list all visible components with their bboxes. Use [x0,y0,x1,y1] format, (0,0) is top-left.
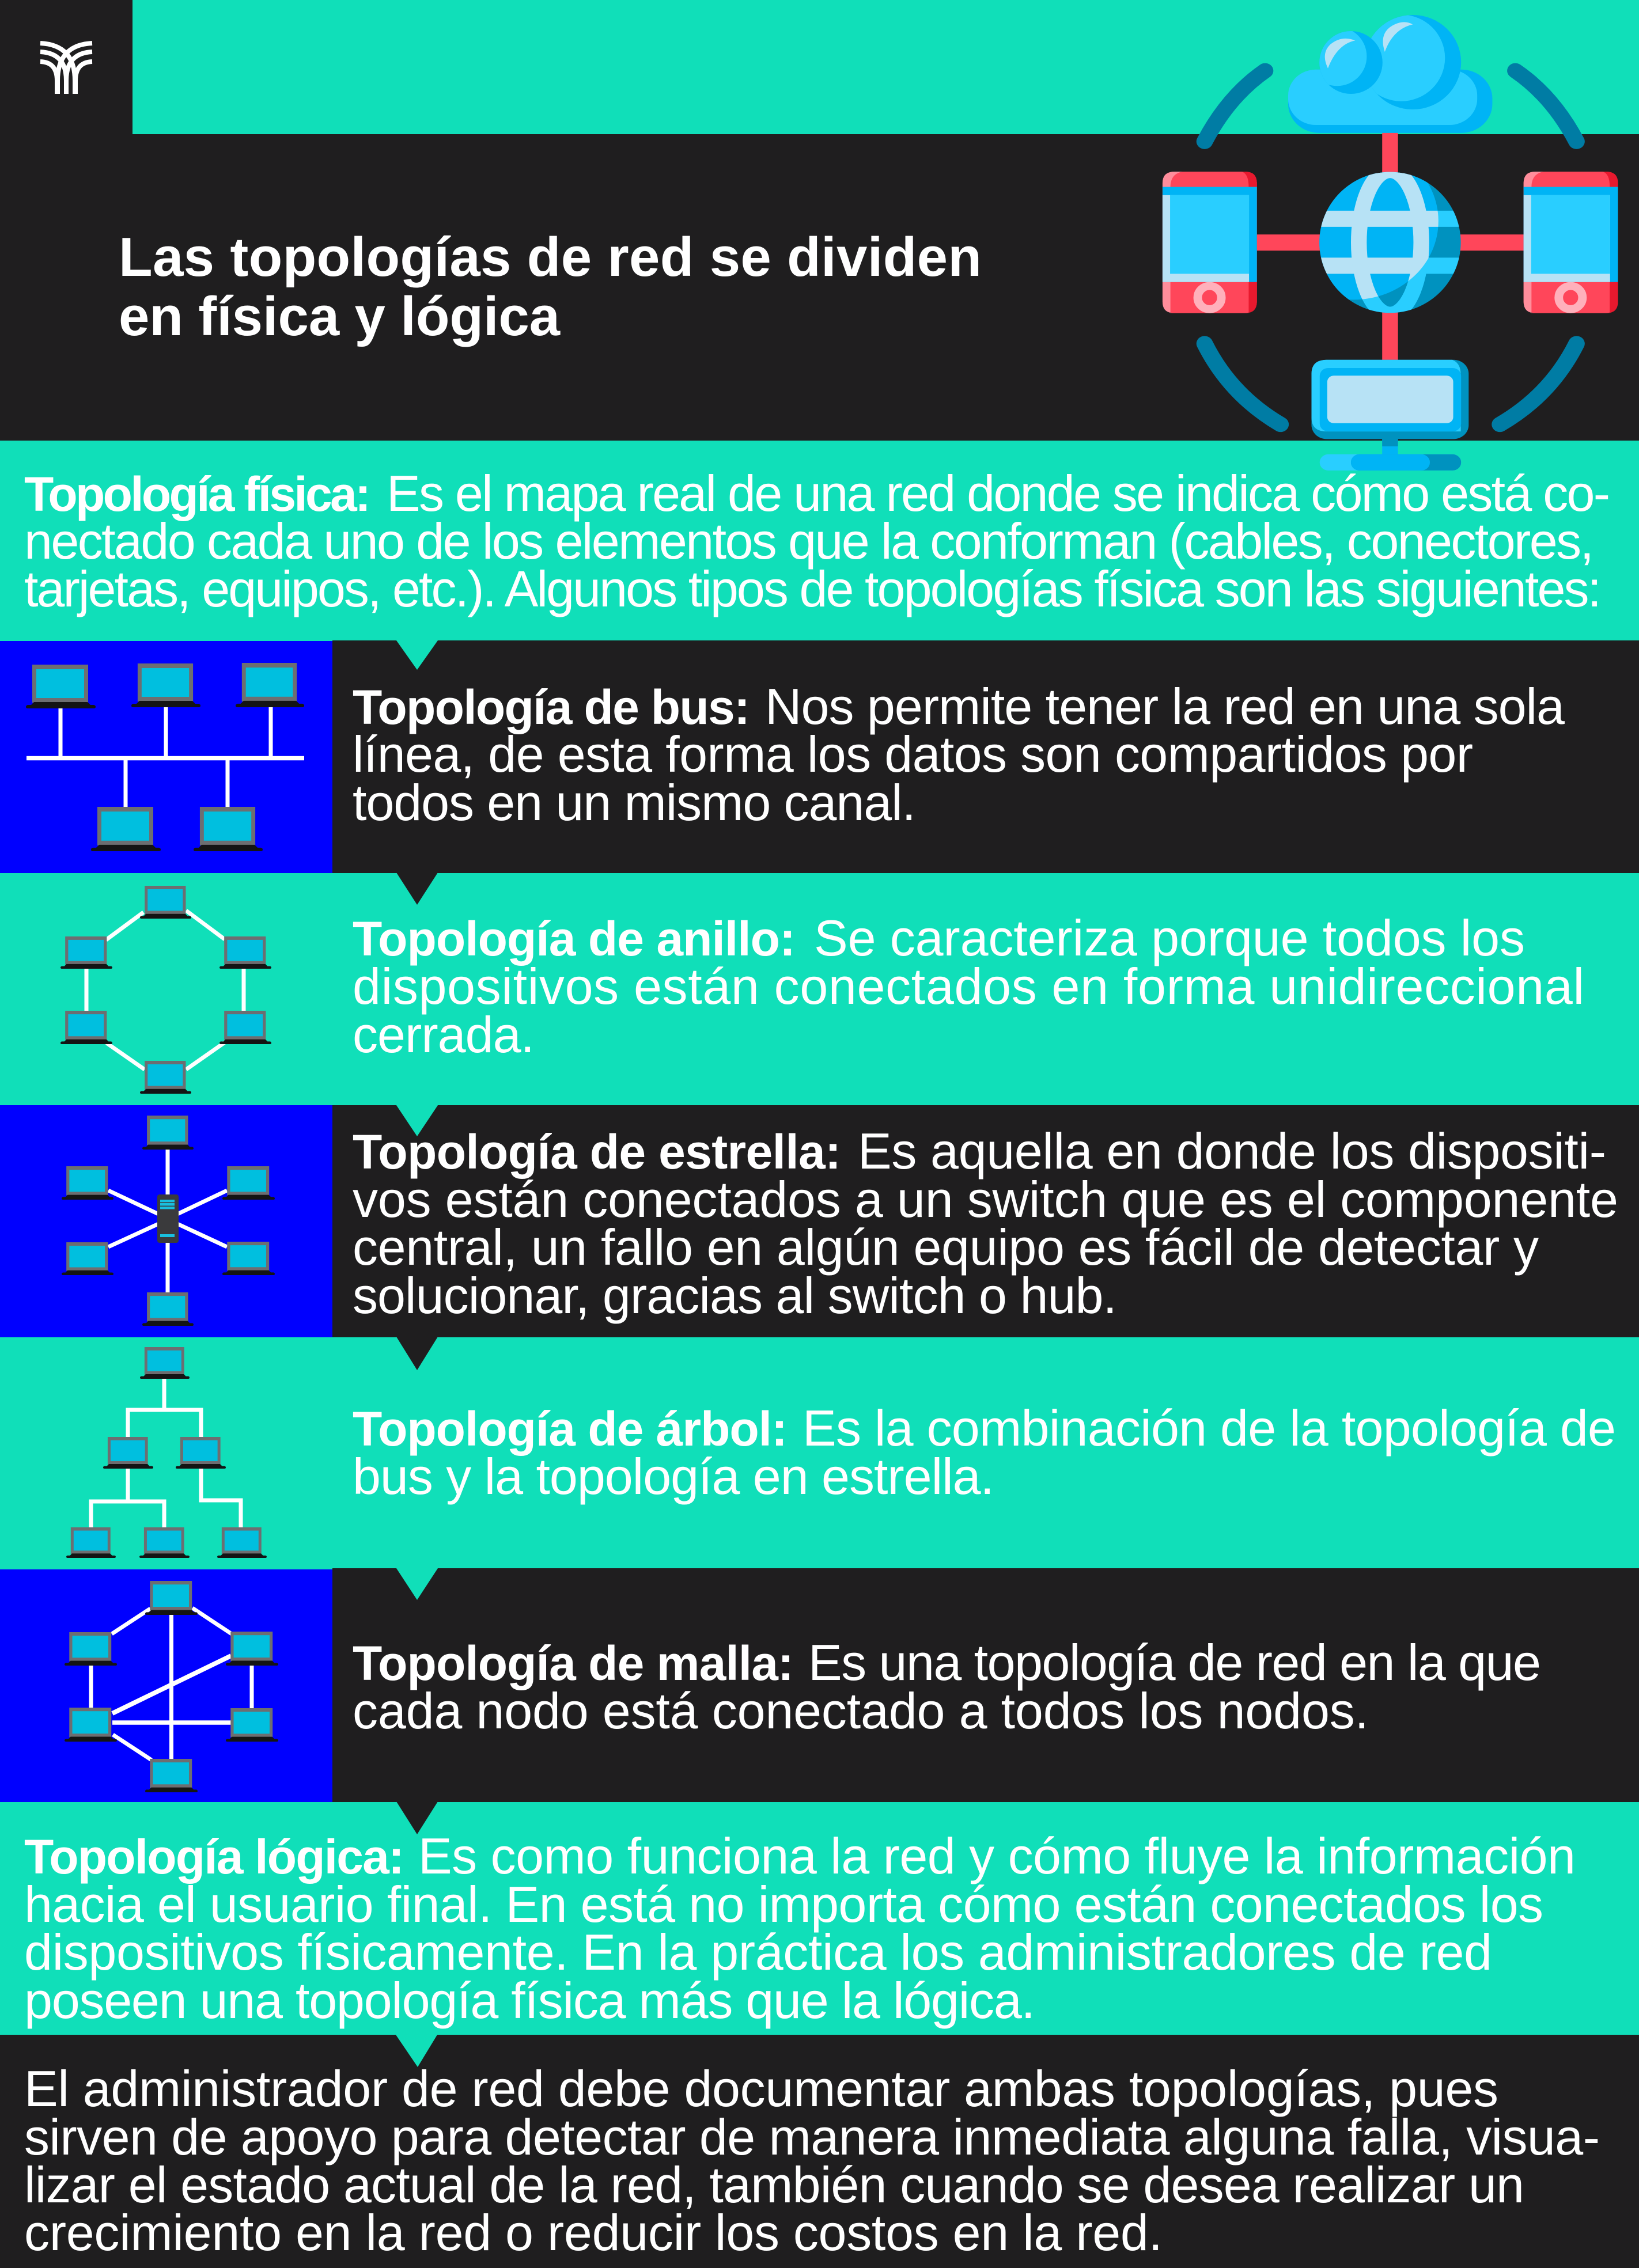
panel: topología de estrella [0,1105,1639,1337]
title [119,226,982,347]
text: closing note: sirven de apoyo para detectar de manera inmediata alguna falla, visua- [24,2108,1600,2165]
text: topología de anillo: Se caracteriza porque todos los [814,909,1525,966]
chart: bus diagram [26,663,304,851]
chart: mesh diagram [65,1581,278,1792]
laptop lower left [65,1708,117,1742]
text: topología de bus: todos en un mismo canal. [353,774,916,831]
logo block [0,0,133,135]
header panel: dark title band [0,134,1639,441]
arrow: teal pointer [396,640,438,670]
laptop top [142,1116,194,1150]
icon: dashed ring arcs [1205,71,1577,424]
icon: right phone [1524,172,1618,313]
chart: tree diagram [66,1347,267,1558]
text block: Topología lógica: dispositivos físicamente. En la práctica los administradores de red [24,1924,1492,1981]
text: topología de estrella: Topología de estrella: [353,1125,841,1179]
chart: ring diagram [60,886,271,1094]
panel: topología de bus [0,640,1639,873]
laptop top [140,886,191,919]
ring cables [86,911,244,1069]
panel: closing note [0,2035,1639,2268]
laptop mid right [219,936,271,969]
laptop 2 [131,663,200,707]
text block: Topología física: Topología física: [24,467,371,521]
laptop leaf 2 [139,1527,190,1558]
arrow: dark pointer [396,873,438,905]
text: topología de anillo [353,909,1584,1063]
text block: Topología física: Es el mapa real de una red donde se indica cómo está co- [387,465,1610,522]
laptop 4 [91,807,161,851]
text block: Topología lógica [24,1827,1576,2029]
laptop lower right [226,1708,278,1742]
text block: Topología lógica: Es como funciona la red y cómo fluye la información [418,1827,1576,1884]
icon: desktop monitor [1311,360,1468,471]
text: topología de anillo: dispositivos están conectados en forma unidireccional [353,958,1584,1015]
text: topología de bus: Nos permite tener la red en una sola [765,678,1565,735]
laptop leaf 1 [66,1527,116,1558]
bus cables [27,706,304,808]
laptop bottom [140,1061,191,1094]
title: Las topologías de red se dividen [119,226,982,288]
text: topología de estrella: Es aquella en donde los dispositi- [858,1122,1606,1179]
laptop mid left [103,1437,153,1469]
text: topología de árbol: bus y la topología en estrella. [353,1448,994,1505]
laptop bottom [142,1292,194,1326]
laptop lower right [222,1242,275,1275]
text: topología de árbol: Es la combinación de la topología de [803,1400,1616,1457]
text: topología de estrella [353,1122,1618,1324]
text block: Topología física: nectado cada uno de los elementos que la conforman (cables, conectores, [24,513,1594,570]
laptop low right [219,1011,271,1044]
text: closing note: lizar el estado actual de la red, también cuando se desea realizar un [24,2156,1524,2213]
icon: left phone [1163,172,1257,313]
laptop 1 [26,665,96,708]
laptop bottom [145,1759,198,1792]
laptop root [140,1347,190,1379]
laptop upper right [222,1166,275,1200]
laptop low left [60,1011,112,1044]
laptop leaf 3 [217,1527,267,1558]
text: topología de estrella: vos están conectados a un switch que es el componente [353,1171,1618,1228]
text: topología de malla: Topología de malla: [353,1636,794,1690]
laptop mid right [176,1437,226,1469]
text: topología de malla: Es una topología de red en la que [808,1634,1541,1691]
panel: topología de anillo [60,873,1584,1094]
text: topología de anillo: Topología de anillo: [353,912,796,966]
laptop mid left [60,936,112,969]
arrow: teal pointer [396,1568,438,1600]
laptop 5 [194,807,263,851]
text: closing note [24,2060,1600,2261]
text: closing note: crecimiento en la red o reducir los costos en la red. [24,2204,1163,2261]
text: topología de árbol: Topología de árbol: [353,1402,788,1456]
laptop upper left [65,1632,117,1666]
laptop upper left [62,1166,113,1200]
icon: red connectors [1255,131,1524,361]
text block: Topología lógica: hacia el usuario final. En está no importa cómo están conectados los [24,1876,1543,1933]
text: closing note: El administrador de red debe documentar ambas topologías, pues [24,2060,1498,2117]
icon: network with cloud, globe, phones and monitor [1163,14,1618,471]
text: topología de árbol [353,1400,1616,1505]
panel: topología de árbol [66,1337,1616,1558]
panel: topología de malla [0,1568,1639,1802]
text block: Topología física: tarjetas, equipos, etc.). Algunos tipos de topologías física son las siguientes: [24,560,1602,617]
text block: Topología lógica: poseen una topología física más que la lógica. [24,1972,1035,2029]
laptop upper right [226,1632,278,1666]
arrow: teal pointer [396,2035,437,2067]
switch [157,1194,179,1243]
arrow: dark pointer into logical section [396,1801,438,1834]
laptop top [145,1581,198,1615]
text block: Topología física [24,465,1610,617]
text: topología de bus: Topología de bus: [353,680,750,734]
text block: Topología lógica: Topología lógica: [24,1830,404,1884]
mesh cables [91,1608,252,1760]
arrow: dark pointer [396,1337,438,1370]
text: topología de anillo: cerrada. [353,1006,535,1063]
text: topología de malla [353,1634,1541,1739]
text: topología de bus: línea, de esta forma los datos son compartidos por [353,726,1473,783]
icon: cloud [1288,14,1492,133]
text: topología de estrella: central, un fallo en algún equipo es fácil de detectar y [353,1219,1539,1276]
tree cables [91,1378,241,1529]
text: topología de bus [353,678,1565,831]
laptop 3 [236,663,304,707]
laptop lower left [62,1242,113,1275]
title: en física y lógica [119,286,561,347]
star cables [108,1148,227,1294]
arrow: teal pointer [396,1105,438,1136]
text: topología de malla: cada nodo está conectado a todos los nodos. [353,1682,1369,1739]
icon: globe [1318,170,1464,314]
text: topología de estrella: solucionar, gracias al switch o hub. [353,1267,1117,1324]
chart: star diagram [62,1116,275,1326]
